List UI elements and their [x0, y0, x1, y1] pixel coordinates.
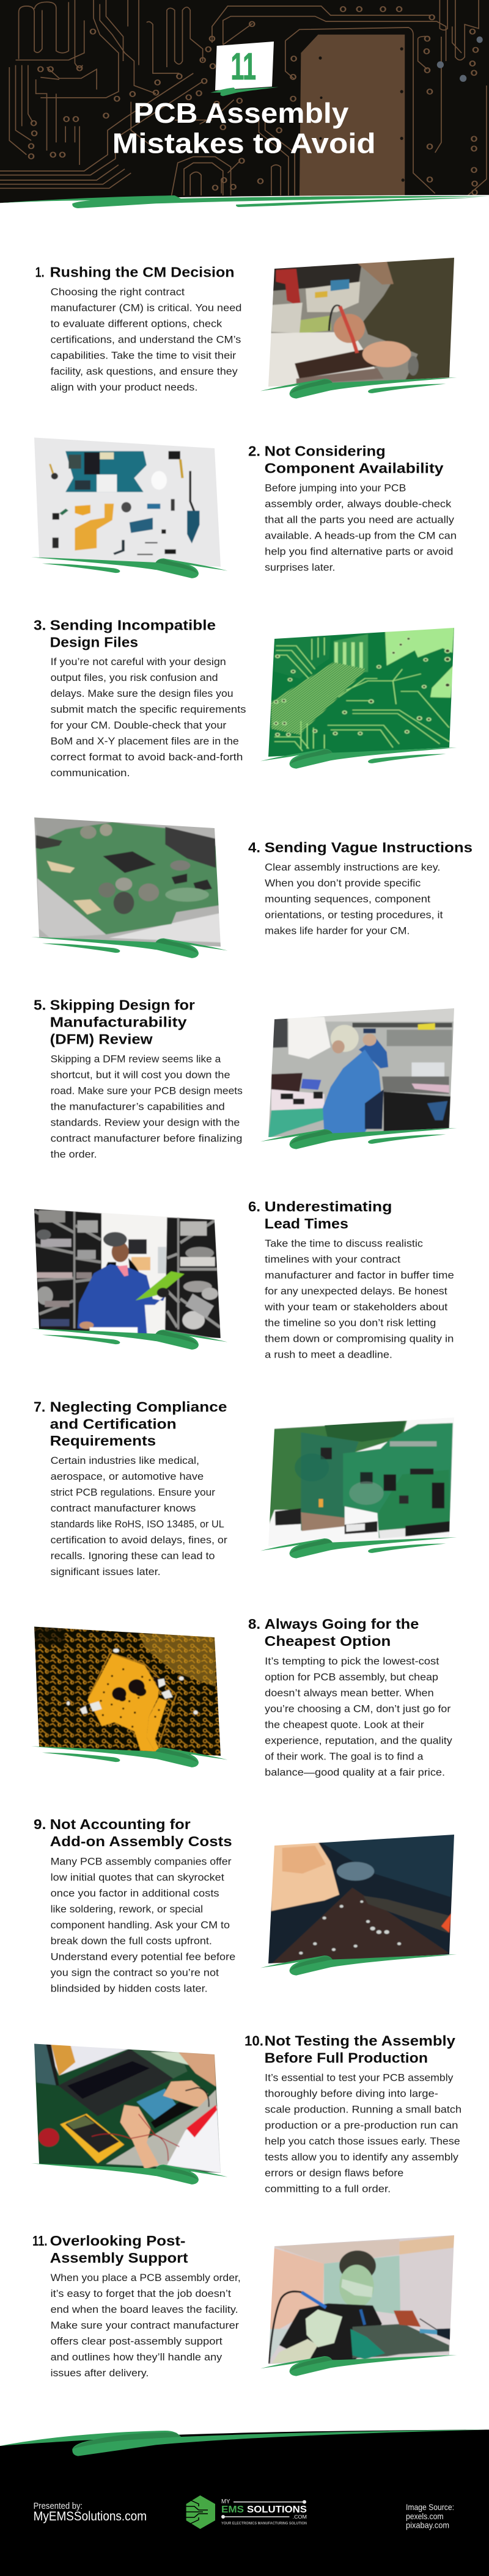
logo wordmark: MY	[221, 2498, 230, 2505]
body text 8: option for PCB assembly, but cheap	[265, 1671, 438, 1683]
body text 3: If you’re not careful with your design	[51, 656, 226, 668]
heading 8: Cheapest Option	[265, 1633, 391, 1649]
body text 7	[51, 1455, 227, 1577]
body text 3: communication.	[51, 767, 130, 779]
body text 6: Take the time to discuss realistic	[265, 1237, 423, 1249]
body text 2: that all the parts you need are actually	[265, 514, 454, 525]
body text 7: strict PCB regulations. Ensure your	[51, 1486, 215, 1498]
heading 6: Lead Times	[265, 1215, 348, 1231]
body text 7: contract manufacturer knows	[51, 1502, 196, 1514]
panel: mistake 1	[35, 256, 458, 399]
body text 9: low initial quotes that can skyrocket	[51, 1871, 224, 1883]
body text 6: timelines with your contract	[265, 1253, 400, 1265]
logo wordmark: EMS	[221, 2505, 244, 2515]
body text 10: committing to a full order.	[265, 2183, 391, 2194]
body text 6: with your team or stakeholders about	[264, 1301, 447, 1312]
white page curve under header	[0, 195, 489, 212]
heading 9: 9.	[34, 1816, 46, 1832]
logo: My EMS Solutions	[186, 2495, 307, 2529]
brush stroke under photo 6	[31, 1328, 227, 1350]
body text 3: for your CM. Double-check that your	[51, 719, 227, 731]
heading 7: 7.	[34, 1399, 45, 1414]
panel: mistake 4	[31, 814, 472, 958]
panel: mistake 9	[34, 1816, 458, 1994]
body text 10: It’s essential to test your PCB assembly	[265, 2072, 454, 2083]
heading 10: Before Full Production	[265, 2050, 428, 2065]
body text 1	[51, 286, 241, 393]
body text 7: Certain industries like medical,	[51, 1455, 199, 1466]
body text 1: certifications, and understand the CM’s	[51, 333, 241, 345]
panel: mistake 6	[31, 1198, 454, 1360]
heading 3: Sending Incompatible	[50, 617, 216, 633]
body text 7: significant issues later.	[51, 1566, 161, 1577]
body text 3: correct format to avoid back-and-forth	[51, 751, 243, 763]
body text 8: balance—good quality at a fair price.	[265, 1766, 445, 1778]
presented by: MyEMSSolutions.com	[34, 2509, 147, 2523]
brush stroke under photo 2	[31, 557, 227, 578]
heading 6: 6.	[248, 1198, 260, 1214]
heading 5: Manufacturability	[50, 1014, 187, 1030]
body text 8: the cheapest quote. Look at their	[265, 1719, 424, 1731]
image source	[406, 2502, 454, 2530]
brush stroke under photo 9	[260, 1954, 457, 1976]
body text 4: mounting sequences, component	[265, 893, 430, 905]
body text 2: assembly order, always double-check	[265, 498, 452, 509]
body text 2: help you find alternative parts or avoid	[265, 546, 453, 557]
heading 5: (DFM) Review	[50, 1031, 153, 1047]
heading 8: 8.	[248, 1616, 260, 1632]
logo wordmark: SOLUTIONS	[247, 2505, 307, 2515]
heading 11: Assembly Support	[50, 2250, 188, 2266]
brush stroke under photo 4	[31, 937, 227, 958]
body text 1: to evaluate different options, check	[51, 318, 222, 329]
body text 9: once you factor in additional costs	[51, 1887, 219, 1899]
body text 8: experience, reputation, and the quality	[265, 1734, 452, 1747]
photo: man soldering a board	[265, 256, 458, 389]
heading 2: Component Availability	[265, 460, 444, 476]
photo: woman with clipboard among shelves	[34, 1209, 221, 1338]
body text 11: When you place a PCB assembly order,	[51, 2272, 241, 2283]
body text 3: BoM and X-Y placement files are in the	[51, 735, 239, 747]
header banner	[0, 0, 489, 212]
presented by	[34, 2501, 147, 2523]
body text 11: offers clear post-assembly support	[51, 2335, 222, 2347]
body text 6: manufacturer and factor in buffer time	[265, 1269, 454, 1281]
body text 6	[264, 1237, 454, 1360]
icon: circuit hexagon	[186, 2495, 215, 2529]
body text 1: facility, ask questions, and ensure they	[51, 365, 238, 377]
photo: woman soldering in goggles	[265, 2233, 458, 2370]
body text 10	[265, 2072, 461, 2194]
body text 11: Make sure your contract manufacturer	[51, 2319, 239, 2331]
body text 2	[265, 482, 457, 573]
body text 1: manufacturer (CM) is critical. You need	[51, 302, 241, 313]
body text 3: delays. Make sure the design files you	[51, 688, 233, 699]
photo: hand soldering a dark board	[268, 1835, 454, 1963]
image source: Image Source:	[406, 2502, 454, 2512]
body text 5: contract manufacturer before finalizing	[51, 1133, 242, 1144]
brush stroke under photo 11	[260, 2355, 457, 2376]
body text 6: a rush to meet a deadline.	[265, 1348, 392, 1360]
body text 5: shortcut, but it will cost you down the	[51, 1069, 230, 1081]
body text 11: end when the board leaves the facility.	[51, 2304, 238, 2315]
body text 9: break down the full costs upfront.	[51, 1935, 212, 1946]
body text 2: surprises later.	[265, 562, 335, 573]
body text 9: you sign the contract so you’re not	[51, 1967, 219, 1978]
title: PCB Assembly	[133, 97, 349, 129]
body text 10: tests allow you to identify any assembly	[265, 2151, 459, 2163]
photo: gold circuit board	[34, 1627, 221, 1756]
heading 7: Neglecting Compliance	[50, 1399, 227, 1414]
heading 11: Overlooking Post-	[50, 2233, 185, 2249]
photo: green circuit board	[268, 628, 454, 757]
body text 4: Clear assembly instructions are key.	[265, 862, 440, 873]
heading 10	[244, 2032, 455, 2065]
heading 5: Skipping Design for	[50, 997, 195, 1013]
body text 7: standards like RoHS, ISO 13485, or UL	[51, 1518, 224, 1530]
heading 1: 1.	[35, 264, 45, 280]
heading 8: Always Going for the	[265, 1616, 419, 1632]
body text 9: Understand every potential fee before	[51, 1951, 235, 1962]
body text 1: align with your product needs.	[51, 381, 197, 393]
panel: mistake 7	[34, 1399, 458, 1577]
badge: number 11	[210, 42, 279, 96]
panel: mistake 11	[32, 2233, 458, 2379]
body text 1: Choosing the right contract	[51, 286, 185, 297]
brush stroke under photo 1	[260, 377, 457, 399]
brush stroke under photo 3	[260, 748, 457, 769]
brush stroke under photo 10	[31, 2163, 227, 2185]
body text 7: aerospace, or automotive have	[51, 1471, 204, 1482]
body text 5: the manufacturer’s capabilities and	[51, 1101, 225, 1113]
panel: mistake 8	[31, 1616, 452, 1778]
logo wordmark: .COM	[293, 2514, 307, 2520]
body text 4: When you don’t provide specific	[265, 878, 421, 889]
photo: testing a board with a multimeter	[34, 2043, 221, 2173]
body text 4	[265, 862, 443, 937]
heading 5: 5.	[34, 997, 46, 1013]
body text 8: of their work. The goal is to find a	[265, 1750, 424, 1763]
heading 9: Add-on Assembly Costs	[50, 1833, 232, 1849]
body text 5: the order.	[51, 1149, 97, 1160]
body text 5	[51, 1053, 243, 1160]
brush stroke under photo 5	[260, 1128, 457, 1149]
logo wordmark	[221, 2498, 307, 2526]
body text 5: road. Make sure your PCB design meets	[51, 1085, 243, 1097]
heading 7: Requirements	[50, 1433, 156, 1449]
photo: disassembled board and components	[31, 436, 224, 572]
body text 11	[51, 2272, 241, 2379]
body text 4: orientations, or testing procedures, it	[265, 909, 443, 921]
header green brush stroke	[0, 195, 489, 208]
heading 10: Not Testing the Assembly	[265, 2032, 455, 2048]
image source: pexels.com	[406, 2511, 444, 2521]
heading 1: Rushing the CM Decision	[50, 264, 235, 280]
heading 4: 4.	[248, 839, 260, 855]
heading 6	[248, 1198, 392, 1231]
body text 11: issues after delivery.	[51, 2367, 149, 2379]
body text 1: capabilities. Take the time to visit their	[51, 349, 237, 361]
body text 6: the timeline so you don’t risk letting	[265, 1317, 436, 1328]
body text 2: Before jumping into your PCB	[265, 482, 406, 493]
heading 2: 2.	[248, 443, 260, 459]
heading 5	[34, 997, 195, 1047]
body text 6: for any unexpected delays. Be honest	[265, 1285, 447, 1297]
body text 8: doesn’t always mean better. When	[265, 1687, 434, 1699]
body text 3: submit match the specific requirements	[51, 704, 246, 715]
body text 5: standards. Review your design with the	[51, 1117, 240, 1129]
body text 9: like soldering, rework, or special	[51, 1903, 203, 1915]
heading 2	[248, 443, 444, 476]
photo: stacked hard drive circuit boards	[270, 1421, 454, 1540]
logo wordmark: YOUR ELECTRONICS MANUFACTURING SOLUTION	[221, 2522, 307, 2526]
body text 5: Skipping a DFM review seems like a	[51, 1053, 221, 1065]
body text 10: thoroughly before diving into large-	[265, 2087, 438, 2099]
body text 4: makes life harder for your CM.	[265, 925, 410, 937]
title	[112, 97, 376, 159]
presented by: Presented by:	[34, 2501, 83, 2511]
panel: mistake 3	[34, 617, 458, 779]
heading 11: 11.	[32, 2233, 48, 2249]
brush stroke under photo 7	[260, 1537, 457, 1559]
body text 2: available. A heads-up from the CM can	[265, 530, 457, 541]
heading 7	[34, 1399, 227, 1449]
panel: mistake 5	[34, 997, 458, 1160]
header background: circuit board	[0, 0, 489, 212]
heading 7: and Certification	[50, 1416, 177, 1432]
body text 6: them down or compromising quality in	[265, 1333, 454, 1344]
body text 3	[51, 656, 246, 779]
body text 9: blindsided by hidden costs later.	[51, 1982, 208, 1994]
body text 10: help you catch those issues early. These	[265, 2135, 460, 2147]
badge: number 11: 11	[231, 46, 256, 88]
body text 11: it’s easy to forget that the job doesn’t	[51, 2288, 231, 2299]
footer	[0, 2429, 489, 2576]
body text 8	[265, 1655, 452, 1778]
panel: mistake 10	[31, 2032, 461, 2194]
panel: mistake 2	[31, 436, 457, 578]
heading 4: Sending Vague Instructions	[265, 839, 472, 855]
photo: factory workers at a line	[268, 1008, 454, 1137]
title: Mistakes to Avoid	[112, 128, 376, 159]
body text 10: production or a pre-production run can	[265, 2119, 458, 2131]
brush stroke under photo 8	[31, 1746, 227, 1767]
heading 8	[248, 1616, 419, 1649]
body text 8: It’s tempting to pick the lowest-cost	[265, 1655, 439, 1667]
heading 3: 3.	[34, 617, 46, 633]
body text 10: errors or design flaws before	[265, 2167, 403, 2178]
image source: pixabay.com	[406, 2520, 449, 2530]
heading 10: 10.	[244, 2032, 263, 2048]
body text 10: scale production. Running a small batch	[265, 2103, 461, 2115]
heading 3	[34, 617, 216, 650]
heading 2: Not Considering	[265, 443, 386, 459]
heading 3: Design Files	[50, 634, 138, 650]
body text 9: component handling. Ask your CM to	[51, 1919, 230, 1930]
heading 9: Not Accounting for	[50, 1816, 191, 1832]
body text 9: Many PCB assembly companies offer	[51, 1855, 232, 1867]
body text 11: and outlines how they’ll handle any	[51, 2351, 222, 2363]
photo: board with capacitors	[34, 817, 221, 947]
body text 8: you’re choosing a CM, don’t just go for	[265, 1703, 451, 1715]
heading 9	[34, 1816, 232, 1849]
footer black band with green stroke	[0, 2429, 489, 2576]
body text 3: output files, you risk confusion and	[51, 672, 218, 683]
body text 7: recalls. Ignoring these can lead to	[51, 1550, 215, 1562]
body text 7: certification to avoid delays, fines, or	[51, 1534, 227, 1546]
heading 11	[32, 2233, 188, 2266]
heading 6: Underestimating	[265, 1198, 392, 1214]
body text 9	[51, 1855, 235, 1994]
